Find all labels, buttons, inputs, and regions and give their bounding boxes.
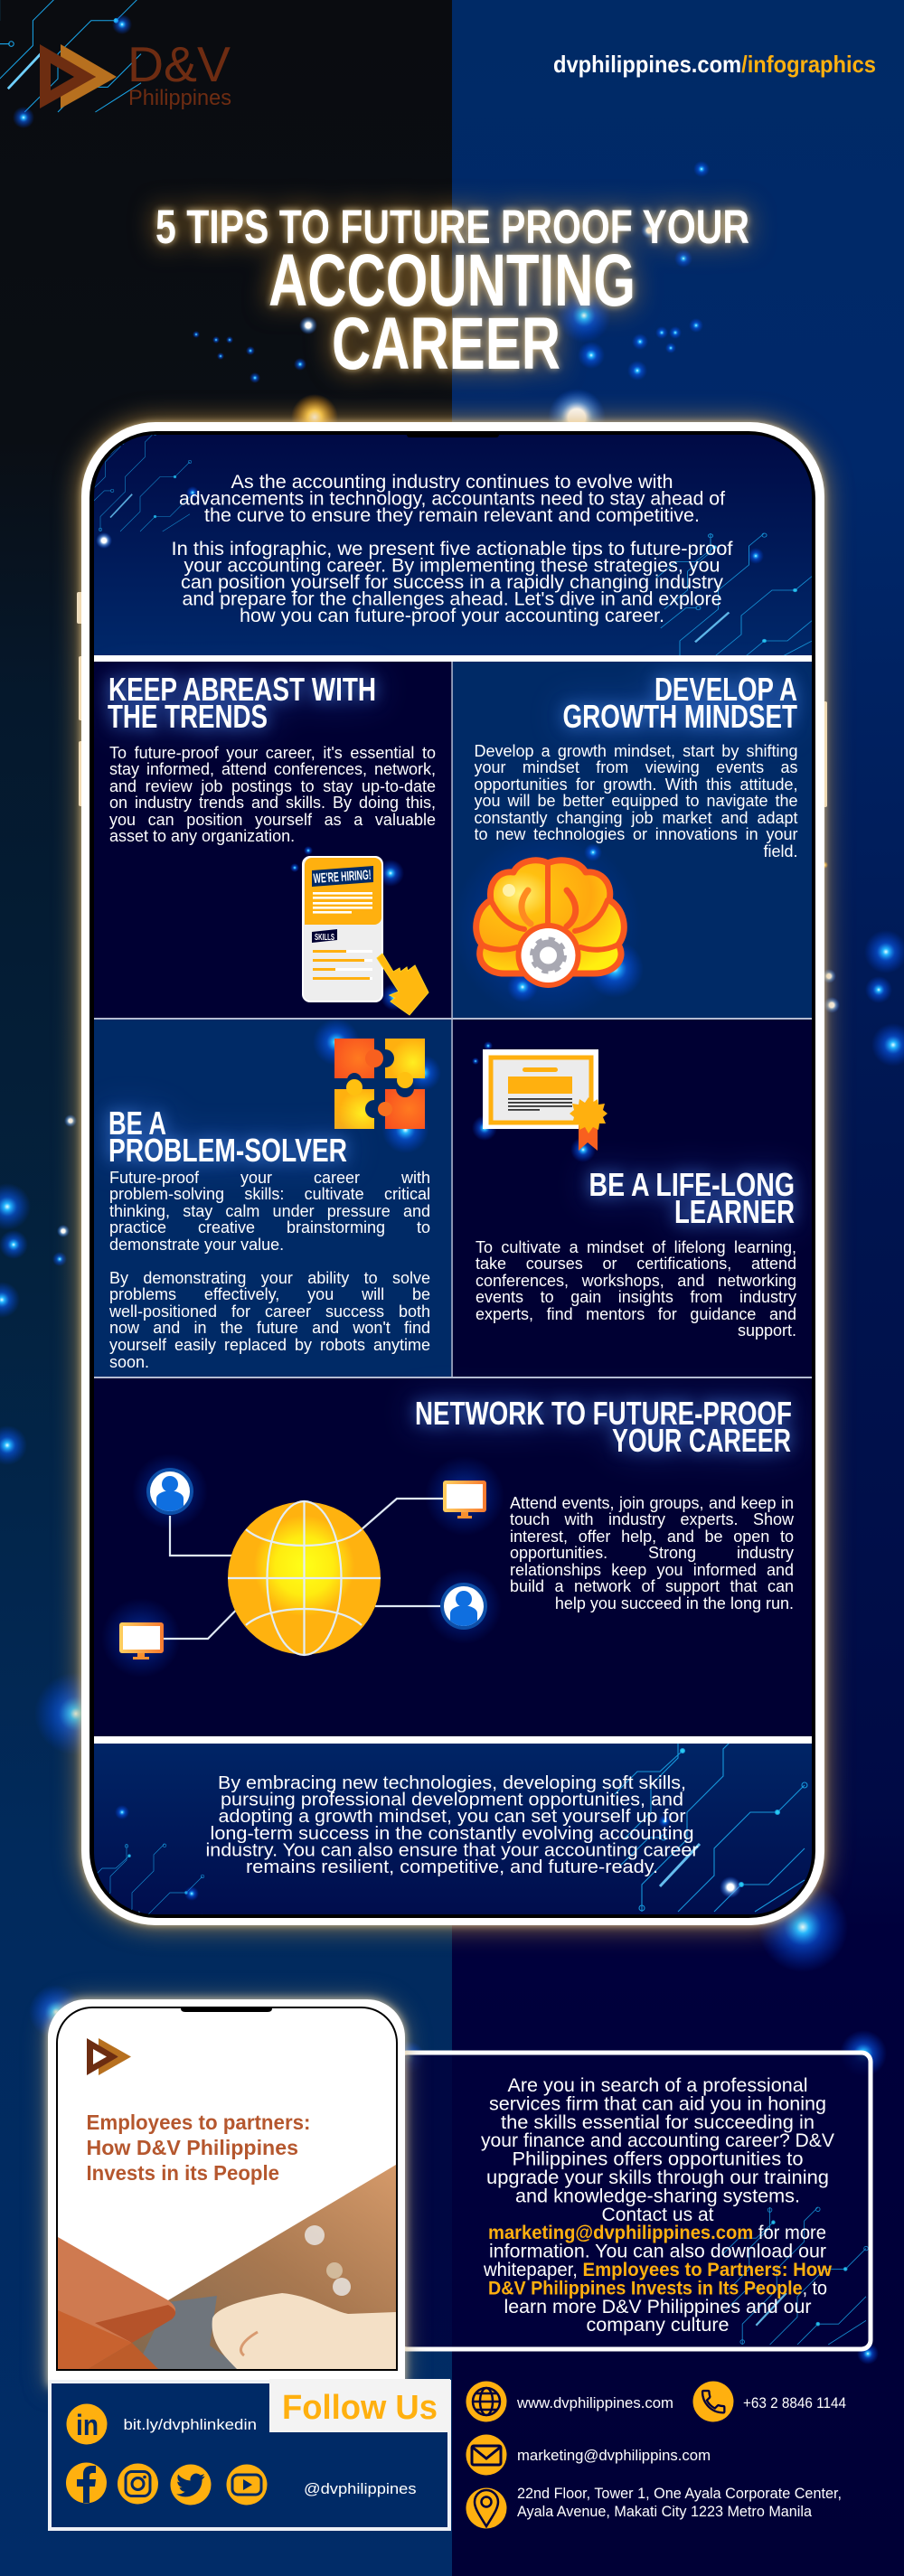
phone: whitepaper cover xyxy=(48,1999,405,2386)
intro text: advancements in technology, accountants need to stay ahead of xyxy=(179,488,725,510)
body text: take courses or certifications, attend xyxy=(476,1255,796,1273)
panel: tip 2 growth mindset xyxy=(452,662,812,1021)
panel: contact details xyxy=(466,2381,846,2529)
title: 5 TIPS TO FUTURE PROOF YOUR xyxy=(155,201,749,254)
heading xyxy=(108,671,376,735)
network diagram xyxy=(101,1453,504,1678)
cover title: Invests in its People xyxy=(87,2161,279,2185)
cover orange shapes xyxy=(58,2237,175,2369)
address xyxy=(517,2485,842,2520)
heading: DEVELOP A xyxy=(654,671,797,708)
intro text: the curve to ensure they remain relevant and competitive. xyxy=(204,505,700,526)
callout text: your finance and accounting career? D&V xyxy=(481,2130,834,2151)
phone: main content frame xyxy=(77,422,827,1952)
heading xyxy=(589,1166,795,1230)
connector lines xyxy=(164,1499,443,1639)
linkedin url: bit.ly/dvphlinkedin xyxy=(123,2416,257,2433)
conclusion text: industry. You can also ensure that your accounting career xyxy=(206,1839,699,1860)
body text xyxy=(109,1170,430,1372)
intro text: can position yourself for success in a rapidly changing industry xyxy=(181,572,724,593)
callout text: Contact us at xyxy=(602,2205,714,2225)
callout text: information. You can also download our xyxy=(489,2242,826,2262)
icon: job posting phone with hand: WE'RE HIRING! xyxy=(313,868,372,887)
body text: stay informed, attend conferences, network, xyxy=(109,760,436,778)
body text: yourself easily replaced by robots anytime xyxy=(109,1336,430,1354)
body text: now and in the future and won't find xyxy=(109,1319,430,1337)
body text xyxy=(476,1238,796,1343)
body text: and review job postings to stay up-to-date xyxy=(109,777,436,795)
logo: D&V Philippines: Philippines xyxy=(128,86,231,110)
panel: introduction xyxy=(85,432,821,660)
panel: conclusion xyxy=(89,1731,812,1952)
body text xyxy=(510,1495,794,1616)
panel: tip 4 life-long learner xyxy=(452,1019,812,1377)
intro text xyxy=(172,472,733,626)
icon: phone xyxy=(692,2381,734,2422)
cover title: How D&V Philippines xyxy=(87,2136,298,2159)
callout text: marketing@dvphilippines.com for more xyxy=(488,2223,826,2243)
body text xyxy=(109,745,436,848)
address: Ayala Avenue, Makati City 1223 Metro Manila xyxy=(517,2503,813,2520)
body text: support. xyxy=(738,1321,796,1340)
gear xyxy=(532,939,564,972)
body text: you will be better equipped to navigate the xyxy=(474,792,797,810)
body text xyxy=(474,743,797,864)
body text: field. xyxy=(763,842,797,860)
cover title: Employees to partners: xyxy=(87,2111,311,2134)
logo: D&V Philippines xyxy=(40,36,231,110)
body text: well-positioned for career success both xyxy=(109,1302,430,1321)
body text: on industry trends and skills. By doing this, xyxy=(109,794,436,812)
conclusion text: remains resilient, competitive, and future-ready. xyxy=(246,1857,658,1877)
conclusion text: long-term success in the constantly evolving accounting xyxy=(210,1823,694,1844)
callout text xyxy=(481,2075,834,2336)
body text: touch with industry experts. Show xyxy=(510,1510,794,1528)
phone notch xyxy=(181,2007,272,2012)
phone notch xyxy=(407,431,499,437)
body text: practice creative brainstorming to xyxy=(109,1218,430,1236)
body text: experts, find mentors for guidance and xyxy=(476,1305,796,1323)
email text: marketing@dvphilippins.com xyxy=(517,2447,711,2464)
icon: brain with gear xyxy=(476,860,624,988)
body text: asset to any organization. xyxy=(109,827,295,845)
intro text: how you can future-proof your accounting career. xyxy=(240,606,664,626)
body text: you can position yourself as a valuable xyxy=(109,811,436,829)
callout text: Philippines offers opportunities to xyxy=(512,2149,803,2170)
panel: tip 1 keep abreast xyxy=(94,662,452,1019)
body text: constantly changing job market and adapt xyxy=(474,809,797,827)
panel: tip 5 network xyxy=(94,1377,812,1736)
body text: to new technologies or innovations in your xyxy=(474,825,797,843)
body text: thinking, stay calm under pressure and xyxy=(109,1202,430,1220)
phone side buttons xyxy=(77,592,827,807)
cover title xyxy=(87,2111,311,2185)
icon: globe xyxy=(228,1501,381,1655)
body text: opportunities. Strong industry xyxy=(510,1544,794,1562)
website url: dvphilippines.com/infographics xyxy=(553,51,876,78)
body text: relationships keep you informed and xyxy=(510,1561,794,1579)
heading: PROBLEM-SOLVER xyxy=(108,1132,347,1169)
title: CAREER xyxy=(332,303,560,385)
icon: person right xyxy=(440,1583,487,1630)
icon: instagram xyxy=(118,2464,158,2504)
heading: THE TRENDS xyxy=(108,698,268,735)
intro text: As the accounting industry continues to evolve with xyxy=(231,472,673,493)
body text: problems effectively, you will be xyxy=(109,1285,430,1303)
icon: youtube xyxy=(226,2464,268,2505)
callout text: services firm that can aid you in honing xyxy=(489,2093,826,2114)
icon: person top left xyxy=(146,1468,193,1515)
intro text: and prepare for the challenges ahead. Let's dive in and explore xyxy=(183,589,721,609)
icon: job posting phone with hand xyxy=(303,857,428,1015)
heading: YOUR CAREER xyxy=(612,1422,791,1459)
body text: build a network of support that can xyxy=(510,1577,794,1595)
icon: linkedin xyxy=(67,2404,107,2444)
address: 22nd Floor, Tower 1, One Ayala Corporate Center, xyxy=(517,2485,842,2502)
conclusion text: pursuing professional development opportunities, and xyxy=(221,1790,683,1810)
intro text: In this infographic, we present five actionable tips to future-proof xyxy=(172,539,733,559)
icon: location pin xyxy=(466,2487,506,2529)
body text: conferences, workshops, and networking xyxy=(476,1272,796,1290)
body text: events to gain insights from industry xyxy=(476,1288,796,1306)
icon: monitor top right xyxy=(443,1481,486,1518)
heading: BE A LIFE-LONG xyxy=(589,1166,795,1203)
icon: linkedin: in xyxy=(76,2409,99,2441)
body text: problem-solving skills: cultivate critical xyxy=(109,1185,430,1203)
body text: interest, offer help, and be open to xyxy=(510,1528,794,1546)
panel: whitepaper callout xyxy=(398,2053,871,2349)
panel: follow us xyxy=(50,2379,450,2529)
intro text: your accounting career. By implementing these strategies, you xyxy=(184,555,720,577)
website text: www.dvphilippines.com xyxy=(516,2394,673,2411)
callout text: company culture xyxy=(586,2315,729,2336)
panel: tip 3 problem solver xyxy=(94,1019,452,1377)
callout text: learn more D&V Philippines and our xyxy=(504,2297,812,2317)
heading: GROWTH MINDSET xyxy=(562,698,797,735)
icon: email xyxy=(466,2435,506,2475)
title xyxy=(155,201,749,385)
conclusion text: adopting a growth mindset, you can set yourself up for xyxy=(219,1806,686,1827)
phone body xyxy=(81,422,824,1925)
callout text: whitepaper, Employees to Partners: How xyxy=(483,2260,833,2280)
heading: follow us: Follow Us xyxy=(282,2389,438,2427)
icon: monitor bottom left xyxy=(119,1622,164,1659)
heading: KEEP ABREAST WITH xyxy=(108,671,376,708)
callout text: and knowledge-sharing systems. xyxy=(515,2186,800,2206)
heading: LEARNER xyxy=(674,1193,795,1230)
cover photo xyxy=(88,2165,396,2369)
logo: D&V Philippines: D&V xyxy=(127,36,231,92)
cover logo xyxy=(87,2038,131,2075)
icon: certificate with seal xyxy=(483,1049,607,1151)
callout text: upgrade your skills through our training xyxy=(486,2167,829,2188)
icon: job posting phone with hand: SKILLS xyxy=(315,933,334,943)
heading: NETWORK TO FUTURE-PROOF xyxy=(415,1395,792,1432)
callout text: Are you in search of a professional xyxy=(508,2075,808,2096)
social handle: @dvphilippines xyxy=(304,2480,416,2497)
body text: By demonstrating your ability to solve xyxy=(109,1269,430,1287)
conclusion text xyxy=(206,1772,699,1877)
body text: soon. xyxy=(109,1353,149,1371)
body text: demonstrate your value. xyxy=(109,1236,284,1254)
conclusion text: By embracing new technologies, developing soft skills, xyxy=(218,1772,686,1793)
callout text: the skills essential for succeeding in xyxy=(501,2112,815,2133)
icon: puzzle pieces xyxy=(334,1039,425,1129)
callout text: D&V Philippines Invests in Its People, to xyxy=(488,2278,827,2299)
icon: twitter xyxy=(170,2464,212,2505)
title: ACCOUNTING xyxy=(268,240,636,322)
icon: facebook xyxy=(66,2462,107,2504)
heading xyxy=(108,1105,347,1169)
heading: BE A xyxy=(108,1105,166,1142)
body text: opportunities for growth. With this attitude, xyxy=(474,776,797,794)
panel: screen content xyxy=(85,432,821,1952)
body text: help you succeed in the long run. xyxy=(555,1594,794,1612)
heading xyxy=(415,1395,792,1459)
body text: your mindset from viewing events as xyxy=(474,758,797,776)
phone number: +63 2 8846 1144 xyxy=(743,2394,846,2411)
heading xyxy=(562,671,797,735)
icon: website xyxy=(466,2381,506,2422)
